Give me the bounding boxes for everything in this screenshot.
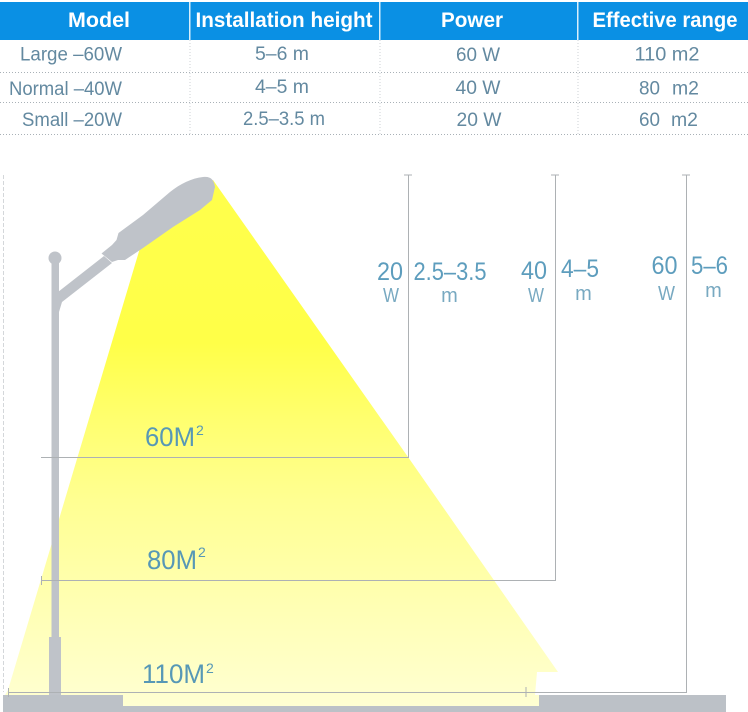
- table header: [0, 2, 748, 40]
- street lamp: [48, 177, 215, 695]
- specification table: [0, 2, 748, 134]
- ground with recess: [3, 695, 726, 712]
- row: large 60W: Large –60W: [20, 44, 122, 66]
- callout: 60 W, 5–6 m: m: [705, 280, 722, 302]
- row: small 20W: Small –20W: [22, 110, 122, 131]
- table header: Effective range: [592, 8, 738, 32]
- callout: 40 W, 4–5 m: m: [575, 283, 592, 305]
- row: small 20W: 2.5–3.5 m: [243, 109, 325, 130]
- light beam: [5, 180, 558, 706]
- row: normal 40W: Normal –40W: [9, 79, 122, 100]
- row: small 20W: [22, 109, 698, 131]
- callout: 20 W, 2.5–3.5 m: [377, 258, 486, 307]
- icon: lamp head: [102, 177, 215, 262]
- callout: 40 W, 4–5 m: 4–5: [561, 255, 599, 283]
- label: 110 square metres: 110M: [142, 659, 205, 689]
- left dashed guide: [2, 175, 4, 692]
- callout: 20 W, 2.5–3.5 m: W: [383, 285, 399, 307]
- callout: 60 W, 5–6 m: [652, 252, 728, 305]
- callout: 40 W, 4–5 m: 40: [521, 257, 547, 285]
- callout: 20 W, 2.5–3.5 m: 2.5–3.5: [414, 258, 486, 286]
- row: large 60W: 110 m2: [634, 44, 700, 66]
- row: normal 40W: m2: [672, 78, 699, 100]
- row: large 60W: 60 W: [456, 45, 500, 66]
- icon: lamp arm: [55, 256, 112, 312]
- row: normal 40W: [9, 77, 699, 100]
- table header: Installation height: [196, 8, 372, 32]
- label: 110 square metres: 2: [206, 660, 214, 676]
- row: large 60W: [20, 44, 700, 66]
- row: small 20W: 60: [639, 110, 660, 131]
- label: 80 square metres: 2: [198, 544, 206, 560]
- icon: pole: [48, 252, 62, 695]
- table header: Power: [441, 8, 504, 32]
- dimension lines: [8, 175, 690, 697]
- callout: 60 W, 5–6 m: 5–6: [691, 252, 728, 280]
- row: normal 40W: 80: [639, 78, 660, 100]
- row: small 20W: m2: [671, 110, 698, 131]
- row: large 60W: 5–6 m: [255, 44, 309, 65]
- callout: 20 W, 2.5–3.5 m: 20: [377, 258, 403, 286]
- callout: 60 W, 5–6 m: W: [658, 283, 675, 305]
- label: 80 square metres: 80M: [147, 545, 197, 575]
- row: small 20W: 20 W: [456, 110, 502, 131]
- row: normal 40W: 4–5 m: [255, 77, 309, 98]
- table header: Model: [68, 8, 130, 32]
- callout: 60 W, 5–6 m: 60: [652, 252, 678, 280]
- callout: 40 W, 4–5 m: W: [528, 285, 544, 307]
- callout: 20 W, 2.5–3.5 m: m: [441, 285, 458, 307]
- callout: 40 W, 4–5 m: [521, 255, 599, 307]
- label: 60 square metres: 60M: [145, 422, 195, 452]
- row: normal 40W: 40 W: [456, 78, 501, 99]
- label: 60 square metres: 2: [196, 422, 204, 438]
